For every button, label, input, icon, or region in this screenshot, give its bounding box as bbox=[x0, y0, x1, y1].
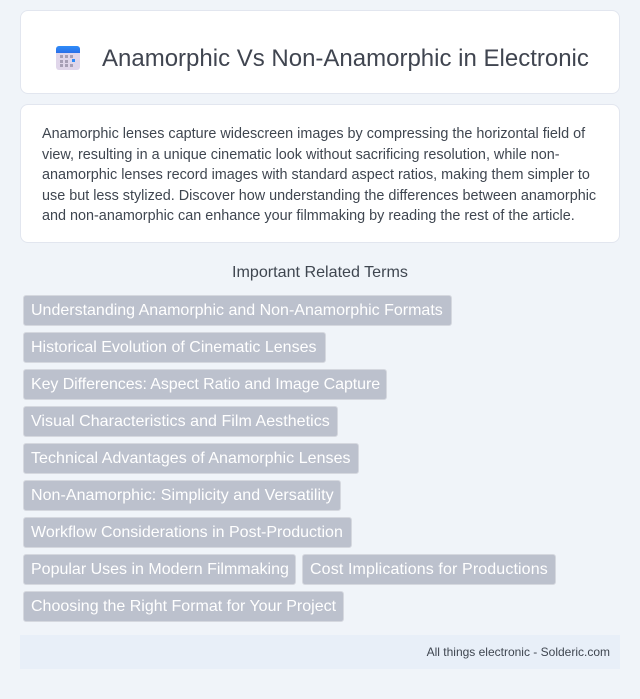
chip bbox=[23, 443, 359, 474]
chip: Popular Uses in Modern Filmmaking bbox=[31, 561, 289, 578]
chip: Visual Characteristics and Film Aesthetics bbox=[31, 413, 330, 430]
text block: introduction: view, resulting in a unique cinematic look without sacrificing resolution, while non- bbox=[42, 147, 560, 163]
text block: introduction: and non-anamorphic can enhance your filmmaking by reading the rest of the article. bbox=[42, 208, 575, 224]
chip bbox=[23, 332, 326, 363]
panel: intro text bbox=[20, 104, 620, 243]
heading: page title: Anamorphic Vs Non-Anamorphic in Electronic bbox=[102, 45, 589, 72]
panel: term chips bbox=[23, 295, 556, 622]
heading: related terms: Important Related Terms bbox=[232, 263, 408, 281]
chip bbox=[23, 369, 387, 400]
panel: title card bbox=[20, 10, 620, 94]
chip bbox=[23, 295, 452, 326]
text block: introduction: anamorphic lenses record images with standard aspect ratios, making them simpler to bbox=[42, 167, 590, 183]
chip: Non-Anamorphic: Simplicity and Versatility bbox=[31, 487, 334, 504]
chip bbox=[23, 591, 344, 622]
footer credit: All things electronic - Solderic.com bbox=[427, 645, 610, 659]
text block: introduction: use but less stylized. Discover how understanding the differences between anamorphic bbox=[42, 188, 596, 204]
chip: Choosing the Right Format for Your Project bbox=[31, 598, 336, 615]
text block: introduction: Anamorphic lenses capture widescreen images by compressing the horizontal field of bbox=[42, 126, 585, 142]
chip bbox=[23, 554, 296, 585]
chip bbox=[23, 517, 352, 548]
chip: Workflow Considerations in Post-Production bbox=[31, 524, 343, 541]
icon: calendar bbox=[56, 46, 80, 70]
chip: Understanding Anamorphic and Non-Anamorphic Formats bbox=[31, 302, 443, 319]
chip bbox=[23, 480, 341, 511]
chip: Cost Implications for Productions bbox=[310, 561, 548, 578]
chip: Historical Evolution of Cinematic Lenses bbox=[31, 339, 316, 356]
footer bbox=[20, 635, 620, 669]
chip: Key Differences: Aspect Ratio and Image Capture bbox=[31, 376, 380, 393]
chip bbox=[23, 406, 338, 437]
text block: introduction bbox=[42, 126, 596, 224]
chip: Technical Advantages of Anamorphic Lenses bbox=[31, 450, 351, 467]
chip bbox=[302, 554, 556, 585]
